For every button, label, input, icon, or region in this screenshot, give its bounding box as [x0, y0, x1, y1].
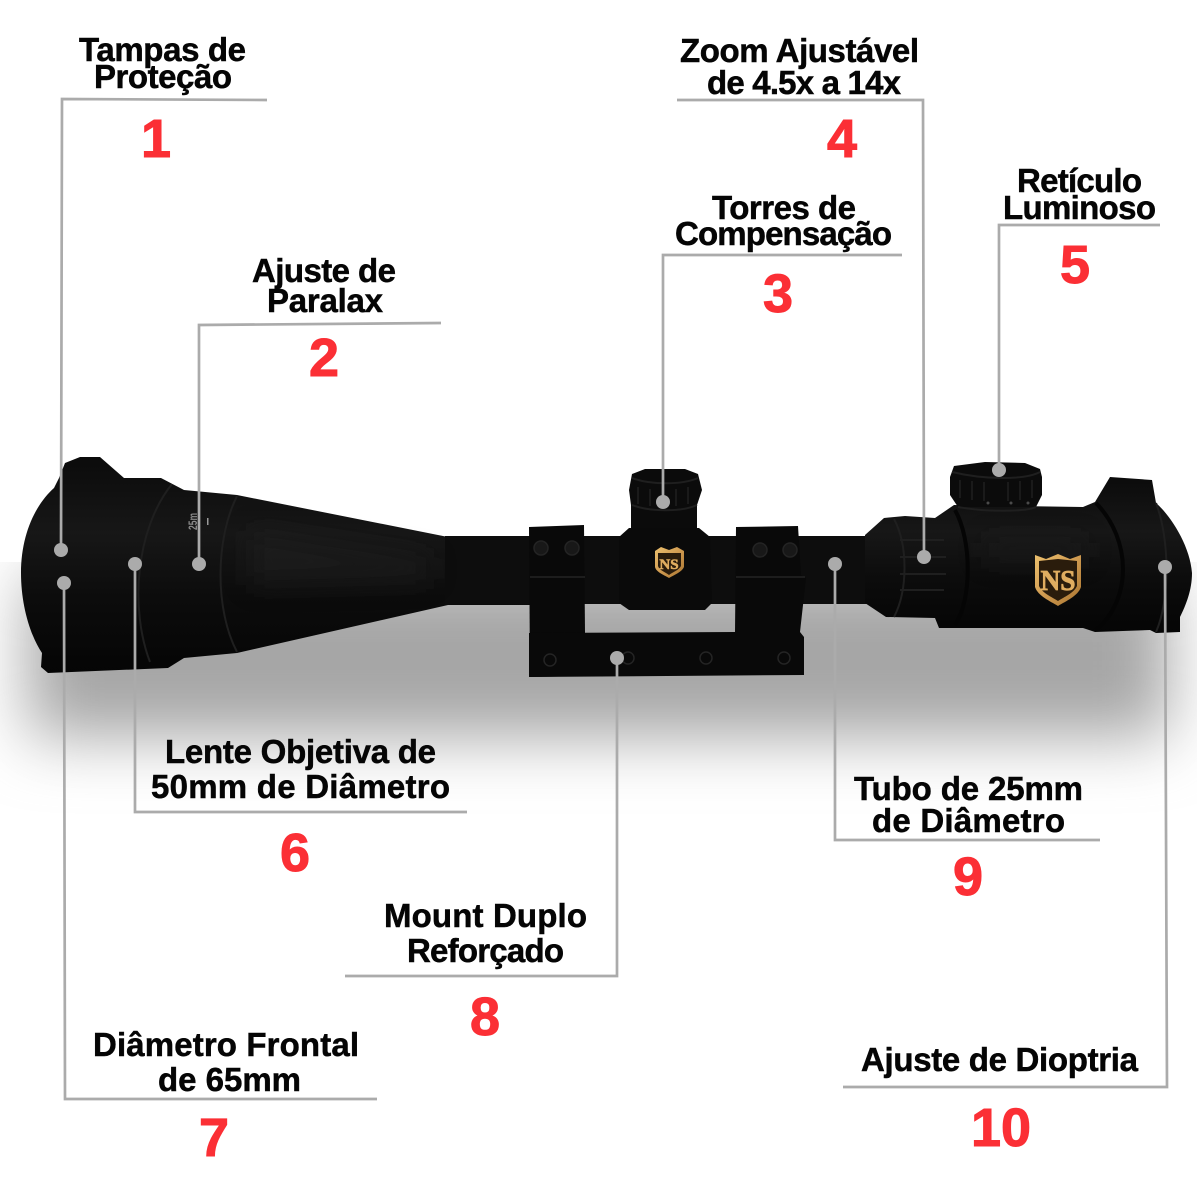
rear eyepiece: [865, 477, 1192, 633]
heading 1: Tampas de: [79, 31, 246, 68]
front ring: [529, 525, 585, 677]
heading 3: Torres de: [712, 189, 856, 226]
number 7: 7: [199, 1108, 229, 1168]
callout 5: Retículo Luminoso: [992, 162, 1160, 477]
heading 7: Diâmetro Frontal: [93, 1026, 359, 1063]
callout 3: Torres de Compensação: [656, 189, 902, 509]
number 4: 4: [827, 109, 857, 169]
background shadow band: [28, 575, 1169, 737]
illumination turret: [950, 462, 1042, 507]
number 2: 2: [309, 328, 339, 388]
callout 8: Mount Duplo: [345, 651, 624, 1047]
heading 8: Reforçado: [407, 932, 564, 969]
callout 4: Zoom Ajustável: [677, 32, 931, 564]
number 1: 1: [141, 109, 171, 169]
number 6: 6: [280, 823, 310, 883]
number 10: 10: [971, 1098, 1031, 1158]
callout 9: Tubo de 25mm: [828, 557, 1100, 907]
heading 9: de Diâmetro: [872, 802, 1065, 839]
callout 6: Lente Objetiva: [128, 557, 467, 883]
heading 8: Mount Duplo: [384, 897, 587, 934]
heading 4: Zoom Ajustável: [680, 32, 919, 69]
parallax scale marking: 25m: [186, 513, 200, 530]
heading 5: Retículo: [1017, 162, 1142, 199]
heading 10: Ajuste de Dioptria: [861, 1041, 1139, 1078]
dial tick marks: [986, 502, 1030, 504]
number 5: 5: [1060, 235, 1090, 295]
heading 9: Tubo de 25mm: [854, 770, 1083, 807]
callout 10: Ajuste de Dioptria: [843, 560, 1172, 1158]
heading 2: Paralax: [267, 282, 384, 319]
small shield logo: [655, 547, 684, 578]
heading 4: de 4.5x a 14x: [707, 64, 902, 101]
callout 7: Diâmetro Frontal: [57, 576, 377, 1168]
objective bell: [21, 457, 530, 673]
heading 5: Luminoso: [1003, 189, 1156, 226]
callout 2: Ajuste de Paralax: [192, 252, 441, 571]
central saddle: [619, 528, 712, 610]
number 3: 3: [763, 264, 793, 324]
callout 1: Tampas de Proteção: [54, 31, 267, 557]
heading 1: Proteção: [94, 58, 232, 95]
heading 3: Compensação: [675, 215, 892, 252]
large shield logo: NS: [1040, 565, 1076, 597]
heading 7: de 65mm: [158, 1061, 301, 1098]
heading 6: 50mm de Diâmetro: [151, 768, 450, 805]
number 9: 9: [953, 847, 983, 907]
windage turret: [629, 469, 702, 528]
main tube: [445, 536, 870, 604]
heading 6: Lente Objetiva de: [165, 733, 436, 770]
barrel rings and knurling: [138, 472, 1167, 662]
mount base: [529, 632, 804, 677]
heading 2: Ajuste de: [252, 252, 396, 289]
blurred scope highlights: [250, 530, 1085, 585]
small shield logo: NS: [659, 557, 679, 573]
mount details and screws: [530, 541, 805, 666]
large shield logo: [1035, 554, 1081, 606]
rear ring: [735, 526, 806, 632]
rifle scope: [21, 457, 1192, 677]
number 8: 8: [470, 987, 500, 1047]
